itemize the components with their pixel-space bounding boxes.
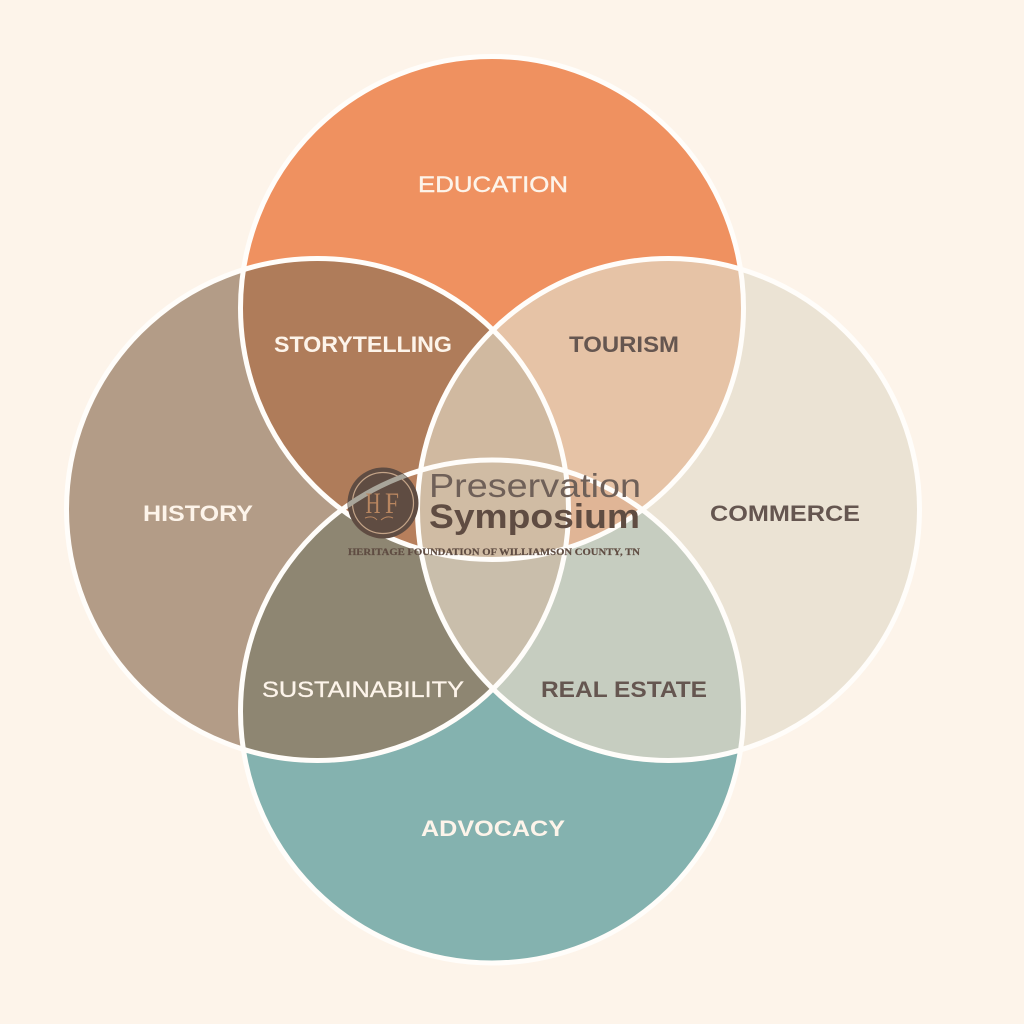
logo word: symposium: Symposium	[429, 498, 640, 536]
label: education: EDUCATION	[418, 172, 568, 197]
venn circle outlines	[66, 56, 920, 963]
label: advocacy: ADVOCACY	[421, 816, 565, 841]
label: storytelling: STORYTELLING	[274, 332, 452, 357]
venn circle fills	[66, 56, 920, 963]
label: sustainability: SUSTAINABILITY	[262, 677, 464, 702]
label: commerce: COMMERCE	[710, 501, 860, 526]
logo: preservation symposium	[348, 468, 640, 556]
icon: HF emblem	[348, 468, 418, 538]
venn diagram infographic	[64, 54, 922, 966]
logo word: preservation: Preservation	[429, 467, 641, 504]
icon: HF emblem: F	[385, 487, 399, 520]
icon: HF emblem: H	[366, 487, 380, 520]
label: tourism: TOURISM	[569, 332, 679, 357]
label: history: HISTORY	[143, 501, 253, 526]
logo tagline: HERITAGE FOUNDATION OF WILLIAMSON COUNTY, TN	[348, 548, 640, 558]
label: real estate: REAL ESTATE	[541, 677, 707, 702]
